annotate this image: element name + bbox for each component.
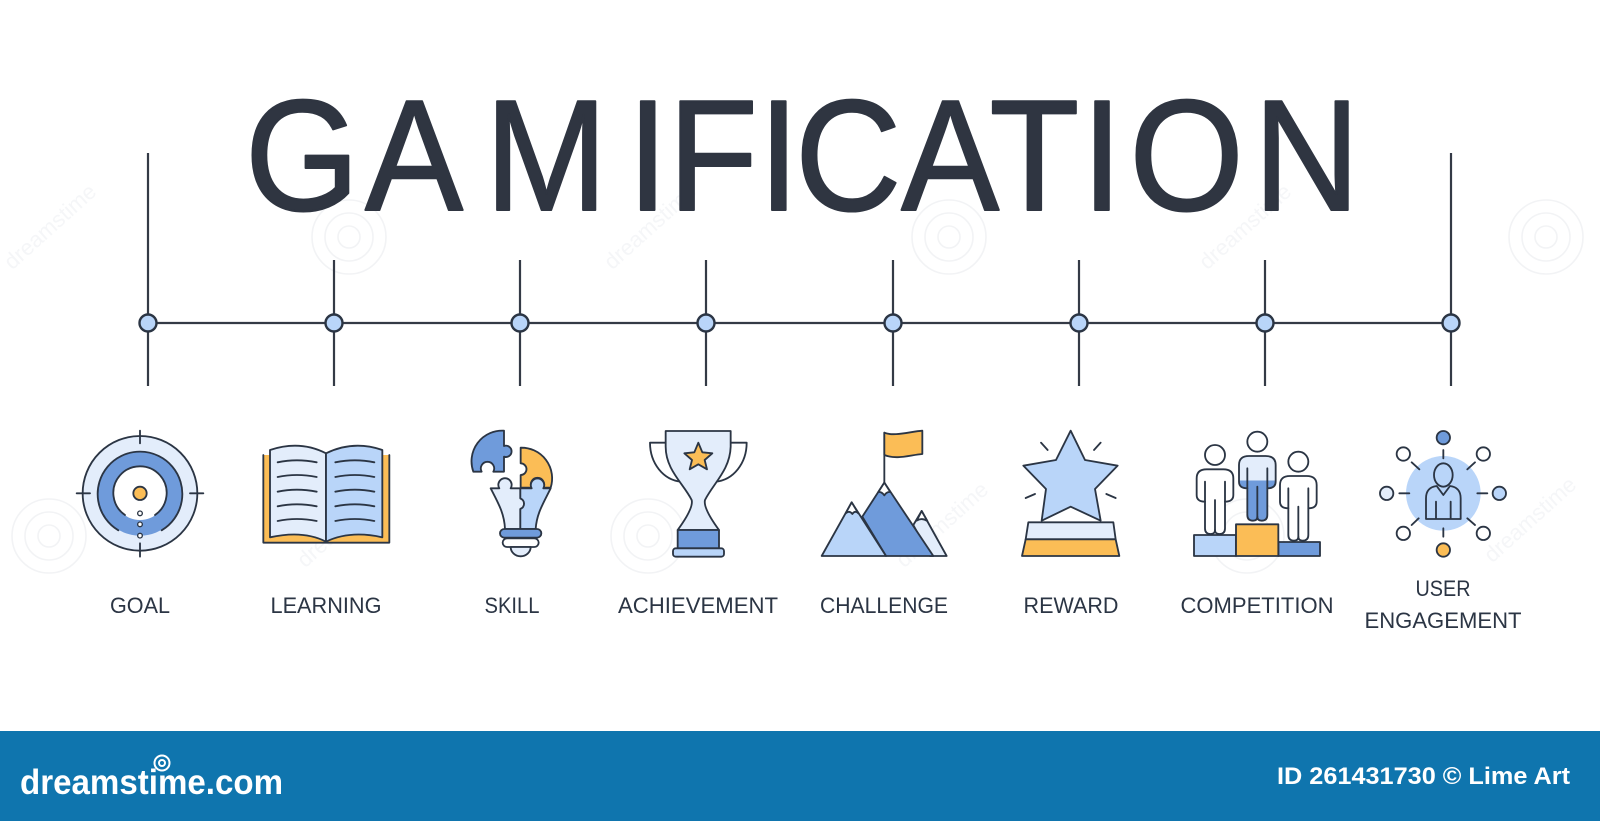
footer banner [0,731,1600,821]
infographic canvas: dreamstime [0,179,101,274]
infographic canvas: dreamstime [891,477,993,572]
infographic canvas: dreamstime [292,477,394,572]
icon: trophy [650,431,747,557]
label: skill: SKILL [484,593,540,618]
icon: puzzle light bulb [472,431,552,556]
timeline [140,153,1460,386]
icon: goal target [77,431,203,557]
icon: user network [1380,431,1506,557]
icons: goal, learning, skill [77,431,552,557]
icon: mountain with flag [822,431,947,556]
label: competition: COMPETITION [1180,593,1334,618]
label: challenge: CHALLENGE [820,593,948,618]
label: user engagement: ENGAGEMENT [1364,608,1522,633]
footer logo text: dreamstime.com [20,763,283,802]
icon: podium with people [1194,432,1320,556]
infographic canvas: dreamstime [1194,179,1296,274]
infographic canvas: dreamstime [599,179,701,274]
label: user engagement: USER [1416,576,1470,601]
icons: competition, user engagement [1194,431,1506,557]
label: achievement: ACHIEVEMENT [618,593,778,618]
icon: open book [263,446,389,543]
icon: star award [1022,431,1119,556]
label: goal: GOAL [110,593,170,618]
infographic canvas: dreamstime [1479,472,1581,567]
footer logo spiral [154,756,170,770]
label: learning: LEARNING [270,593,382,618]
image credit: ID 261431730 © Lime Art [1277,763,1570,790]
icons: achievement, challenge, reward [650,431,1119,557]
label: reward: REWARD [1024,593,1118,618]
title: GAMIFICATION [245,68,1360,244]
label: user engagement [1364,576,1522,633]
